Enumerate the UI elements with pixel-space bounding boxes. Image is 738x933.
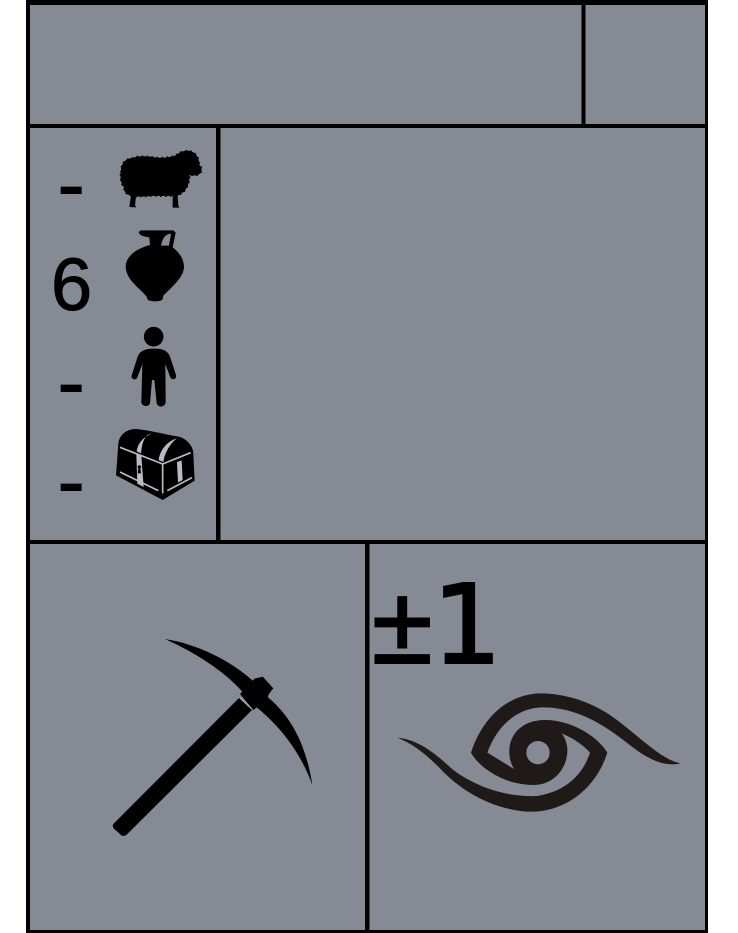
ability modifier bbox=[372, 561, 502, 689]
panel: main bbox=[220, 128, 705, 540]
panel: pickaxe bbox=[30, 544, 365, 930]
icon: treasure chest bbox=[116, 429, 195, 500]
resource value: treasure: - bbox=[58, 436, 85, 527]
icon: eye bbox=[397, 693, 681, 812]
panel: top left bbox=[30, 5, 582, 124]
resource value: person: - bbox=[58, 337, 85, 428]
resource value: jug: 6 bbox=[51, 243, 92, 326]
ability modifier: 1 bbox=[432, 561, 502, 689]
icon: sheep bbox=[121, 151, 202, 208]
ability modifier: ± bbox=[372, 564, 432, 687]
panel: resources bbox=[30, 128, 216, 540]
icon: person bbox=[131, 327, 176, 406]
resource value: sheep: - bbox=[58, 139, 85, 230]
icon: pickaxe bbox=[113, 639, 312, 836]
panel: ability bbox=[370, 544, 705, 930]
icon: jug bbox=[126, 230, 184, 301]
panel: top right bbox=[586, 5, 705, 124]
